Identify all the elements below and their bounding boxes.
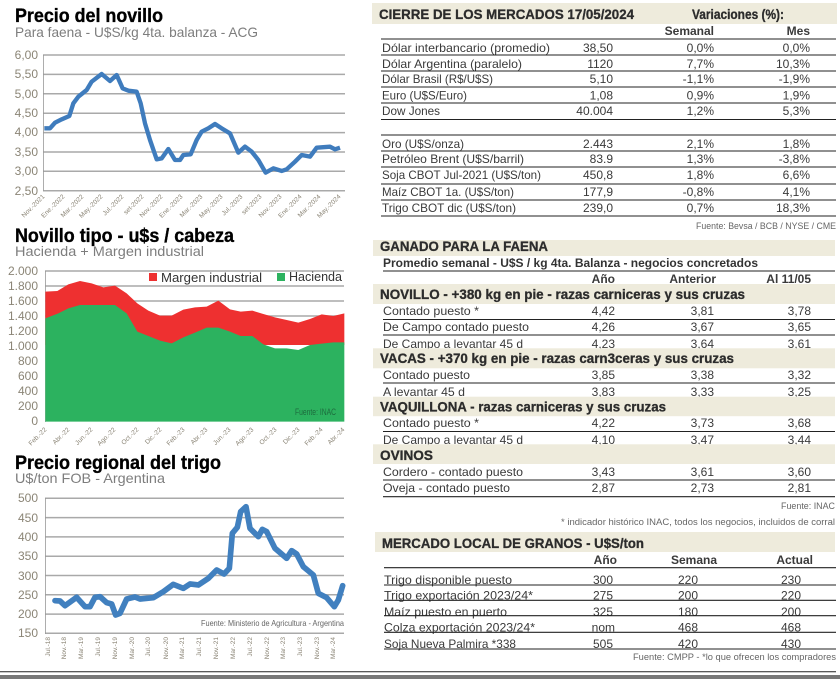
rows: novillo: De Campo contado puesto [383,320,529,334]
area chart: hacienda y margen industrial: 800 [18,354,38,368]
table: mercados: 1,9% [783,88,810,102]
area chart: hacienda y margen industrial: 1.000 [8,339,38,353]
column headers: Mes [787,24,810,38]
band: vacas [373,348,835,368]
band: ovinos [373,444,835,464]
line chart: precio del trigo: Nov.-22 [264,637,271,659]
header band: Variaciones (%): [692,7,784,22]
rows: novillo: 4,23 [592,337,615,351]
line chart: precio del novillo: May.-2022 [78,193,105,220]
column headers [594,553,813,567]
line chart: precio del trigo: Nov.-19 [112,637,119,659]
rows: novillo: 3,78 [788,304,811,318]
rows: vaquillona: 3,73 [691,416,714,430]
table: mercados: Maíz CBOT 1a. (U$S/ton) [382,185,514,199]
line chart: precio del trigo: Jul.-23 [297,637,304,657]
column headers: Actual [776,553,813,567]
area chart: hacienda y margen industrial [8,264,347,448]
table: mercados: 2,1% [687,137,714,151]
table: mercados: 1,2% [687,104,714,118]
table: mercados: 5,10 [590,72,613,86]
table: mercados: 0,7% [687,201,714,215]
line chart: precio del trigo: 400 [18,530,38,544]
line chart: precio del trigo: 450 [18,511,38,525]
line chart: precio del trigo: Mar.-24 [330,637,337,659]
table: mercados: 40.004 [576,104,613,118]
table: granos: 468 [781,621,801,635]
line chart: precio del trigo: Mar.-19 [78,637,85,659]
table: mercados [381,39,836,216]
band: vaquillona [373,397,835,416]
rows: novillo [383,304,835,351]
table: mercados: Dólar Brasil (R$/U$S) [382,72,493,86]
area chart: hacienda y margen industrial: 200 [18,399,38,413]
table: mercados: 1,08 [590,88,613,102]
area chart: hacienda y margen industrial: Dic.-23 [282,426,302,446]
area chart: hacienda y margen industrial: Abr.-24 [327,426,347,446]
area chart: hacienda y margen industrial: Jun.-22 [74,426,95,447]
line chart: precio del trigo: 300 [18,569,38,583]
table: mercados: 0,0% [687,41,714,55]
rows: ovinos: 3,60 [788,465,811,479]
line chart: precio del trigo: 500 [18,491,38,505]
line chart: precio del novillo: Nov.-2023 [258,193,284,219]
rows: novillo: 3,65 [788,320,811,334]
area chart: hacienda y margen industrial: Ago.-23 [234,426,256,448]
table: mercados: 7,7% [687,57,714,71]
table: mercados: 1,8% [687,168,714,182]
table: granos: 180 [678,605,698,619]
table: mercados: 83.9 [590,152,613,166]
line chart: precio del trigo: 150 [18,626,38,640]
title: precio del novillo: Precio del novillo [15,6,163,27]
table: mercados: -1,9% [779,72,810,86]
rows: ovinos: 2,81 [788,481,811,495]
table: mercados: 5,3% [783,104,810,118]
rows: novillo: 4,26 [592,320,615,334]
table: mercados: 239,0 [583,201,613,215]
line chart: precio del trigo: 350 [18,549,38,563]
area chart: hacienda y margen industrial: 1.800 [8,279,38,293]
table: mercados: Euro (U$S/Euro) [382,88,467,102]
rows: novillo: 4,42 [592,304,615,318]
table: granos: 220 [678,573,698,587]
header band: GANADO PARA LA FAENA [380,239,548,254]
line chart: precio del trigo: 250 [18,588,38,602]
rows: ovinos: 3,43 [592,465,615,479]
source: inac: Fuente: INAC [295,407,336,417]
rows: vacas: 3,83 [592,385,615,399]
band: novillo: NOVILLO - +380 kg en pie - razas carniceras y sus cruzas [380,287,745,302]
rows: vacas: 3,85 [592,368,615,382]
line chart: precio del trigo: Jul.-20 [145,637,152,657]
rows: vaquillona: 3,47 [691,433,714,447]
line chart: precio del trigo: Nov.-21 [213,637,220,659]
subtitle: fob argentina: U$/ton FOB - Argentina [15,470,165,486]
panel: cierre de los mercados [372,3,837,231]
area chart: hacienda y margen industrial: 1.200 [8,324,38,338]
line chart: precio del trigo: Mar.-23 [280,637,287,659]
rows: vaquillona [383,416,835,447]
line chart: precio del trigo: Jul.-21 [196,637,203,657]
table: granos: 200 [678,588,698,602]
rows: novillo: 3,61 [788,337,811,351]
table: mercados: Oro (U$S/onza) [382,137,464,151]
table: granos: 200 [781,605,801,619]
subtitle: hacienda + margen industrial: Hacienda + Margen industrial [15,243,204,259]
line chart: precio del novillo: 2,50 [15,184,38,198]
band: ovinos: OVINOS [380,448,433,463]
area chart: hacienda y margen industrial: Ago.-22 [96,426,118,448]
table: granos: nom [592,621,615,635]
table: mercados: 10,3% [776,57,810,71]
header band: MERCADO LOCAL DE GRANOS - U$S/ton [382,536,644,551]
table: mercados: Dólar Argentina (paralelo) [382,57,522,71]
column headers [592,272,811,286]
area chart: hacienda y margen industrial: Abr.-22 [52,426,72,446]
line chart: precio del novillo: Mar.-2022 [60,193,86,219]
rows: vacas: 3,33 [691,385,714,399]
line chart: precio del novillo: Jul.-2022 [102,193,126,217]
line chart: precio del novillo: 4,00 [15,125,38,139]
line chart: precio del trigo: Mar.-22 [230,637,237,659]
legend: margen industrial: Margen industrial [161,270,262,285]
legend: hacienda: Hacienda [289,269,343,284]
table: granos: 325 [593,605,613,619]
area chart: hacienda y margen industrial: Dic.-22 [144,426,164,446]
rows: ovinos: 2,87 [592,481,615,495]
rows: vacas: 3,32 [788,368,811,382]
area chart: hacienda y margen industrial: 1.400 [8,309,38,323]
area chart: hacienda y margen industrial: Oct.-23 [258,426,279,446]
table: mercados: 0,9% [687,88,714,102]
table: mercados: 1,8% [783,137,810,151]
table: granos: Trigo exportación 2023/24* [384,588,533,602]
rows: vaquillona: Contado puesto * [383,416,479,430]
table: granos: Colza exportación 2023/24* [384,621,535,635]
line chart: precio del novillo: 3,00 [15,164,38,178]
table: mercados: Dow Jones [382,104,440,118]
panel: precio regional del trigo [15,453,344,659]
rows: novillo: De Campo a levantar 45 d [383,337,523,351]
source: inac: Fuente: INAC [781,501,835,511]
table: granos: Soja Nueva Palmira *338 [384,637,516,651]
table: granos: 420 [678,637,698,651]
table: mercados: 450,8 [583,168,613,182]
band: vacas: VACAS - +370 kg en pie - razas carn3ceras y sus cruzas [380,351,734,366]
area chart: hacienda y margen industrial: 600 [18,369,38,383]
line chart: precio del trigo [18,491,344,659]
line chart: precio del novillo: Mar.-2024 [297,193,323,219]
column headers: Al 11/05 [766,272,811,286]
header band [372,3,837,24]
line chart: precio del novillo: Nov.-2022 [139,193,165,219]
line chart: precio del novillo: Ene.-2023 [158,193,185,220]
header band [375,532,835,552]
line chart: precio del novillo: 6,00 [15,48,38,62]
line chart: precio del trigo: Nov.-20 [163,637,170,659]
header band: CIERRE DE LOS MERCADOS 17/05/2024 [379,7,634,22]
rows: vacas: A levantar 45 d [383,385,465,399]
area chart: hacienda y margen industrial: 400 [18,384,38,398]
line chart: precio del novillo: Nov.-2021 [21,193,47,219]
table: granos: 230 [781,573,801,587]
line chart: precio del trigo: Nov.-18 [61,637,68,659]
line chart: precio del novillo: Jul.-2023 [221,193,245,217]
table: granos: 505 [593,637,613,651]
table: granos: 220 [781,588,801,602]
line chart: precio del trigo: Nov.-23 [314,637,321,659]
rows: ovinos: 3,61 [691,465,714,479]
rows: ovinos: Cordero - contado puesto [383,465,523,479]
line chart: precio del novillo: 5,50 [15,67,38,81]
rows: vacas: 3,25 [788,385,811,399]
column headers: Semanal [665,24,714,38]
line chart: precio del novillo: set-2023 [241,193,264,216]
subheading: promedio semanal: Promedio semanal - U$S / kg 4ta. Balanza - negocios concretados [383,256,758,270]
table: granos [384,568,836,651]
rows: ovinos: Oveja - contado puesto [383,481,510,495]
table: mercados: 2.443 [583,137,613,151]
source: cmpp: Fuente: CMPP - *lo que ofrecen los compradores [633,652,837,662]
line chart: precio del trigo: 200 [18,607,38,621]
line chart: precio del novillo: Mar.-2023 [179,193,205,219]
table: mercados: Petróleo Brent (U$S/barril) [382,152,524,166]
rows: vaquillona: 3,44 [788,433,811,447]
panel: ganado para la faena [373,239,835,527]
subtitle: para faena: Para faena - U$S/kg 4ta. balanza - ACG [15,24,258,40]
rows: vaquillona: 3,68 [788,416,811,430]
panel: novillo tipo [8,226,347,448]
table: granos: 300 [593,573,613,587]
table: mercados: 1,3% [687,152,714,166]
source: mercados: Fuente: Bevsa / BCB / NYSE / CME [696,221,836,231]
panel: precio del novillo [15,6,345,220]
table: granos: 275 [593,588,613,602]
line chart: precio del trigo: Mar.-21 [179,637,186,659]
area chart: hacienda y margen industrial: Oct.-22 [120,426,141,446]
rows: novillo: 3,64 [691,337,714,351]
column headers: Anterior [669,272,716,286]
rows: vacas [383,368,835,399]
table: granos: 468 [678,621,698,635]
area chart: hacienda y margen industrial: Jun.-23 [212,426,233,447]
line chart: precio del novillo: Ene.-2022 [40,193,67,220]
rows: ovinos: 2,73 [691,481,714,495]
table: granos: Maíz puesto en puerto [384,605,507,619]
line chart: precio del novillo: May.-2023 [198,193,225,220]
line chart: precio del trigo: Mar.-20 [129,637,136,659]
table: granos: Trigo disponible puesto [384,573,512,587]
table: mercados: 177,9 [583,185,613,199]
table: mercados: 1120 [587,57,613,71]
column headers: Año [594,553,617,567]
table: mercados: 0,0% [783,41,810,55]
table: mercados: 4,1% [783,185,810,199]
table: mercados: -3,8% [779,152,810,166]
area chart: hacienda y margen industrial: 0 [31,414,38,428]
line chart: precio del novillo: 3,50 [15,145,38,159]
line chart: precio del trigo: Jul.-22 [247,637,254,657]
column headers: Semana [671,553,717,567]
line chart: precio del trigo: Jul.-18 [45,637,52,657]
rows: vacas: 3,38 [691,368,714,382]
band: novillo [373,284,835,304]
rows: novillo: 3,67 [691,320,714,334]
rows: vacas: Contado puesto [383,368,470,382]
footnote: indicador historico: * indicador histórico INAC, todos los negocios, incluidos de corral [561,517,835,527]
band: vaquillona: VAQUILLONA - razas carniceras y sus cruzas [380,400,666,415]
header band [373,239,835,256]
line chart: precio del novillo: May.-2024 [316,193,343,220]
line chart: precio del novillo: set-2022 [123,193,146,216]
rows: vaquillona: 4,10 [592,433,615,447]
table: mercados: Trigo CBOT dic (U$S/ton) [382,201,516,215]
rows: novillo: 3,81 [691,304,714,318]
title: precio regional del trigo: Precio regional del trigo [15,453,221,474]
panel: mercado local de granos [375,532,837,662]
area chart: hacienda y margen industrial: 1.600 [8,294,38,308]
rows: novillo: Contado puesto * [383,304,479,318]
line chart: precio del novillo [15,48,345,220]
line chart: precio del novillo: 4,50 [15,106,38,120]
area chart: hacienda y margen industrial: Feb.-24 [304,426,325,447]
line chart: precio del trigo: Jul.-19 [95,637,102,657]
table: mercados: -0,8% [683,185,714,199]
table: mercados: 6,6% [783,168,810,182]
table: granos: 430 [781,637,801,651]
title: novillo tipo: Novillo tipo - u$s / cabeza [15,226,234,247]
table: mercados: Dólar interbancario (promedio) [382,41,550,55]
column headers: Año [592,272,615,286]
table: mercados: Soja CBOT Jul-2021 (U$S/ton) [382,168,541,182]
rows: vaquillona: De Campo a levantar 45 d [383,433,523,447]
line chart: precio del novillo: Ene.-2024 [277,193,304,220]
column headers [665,24,810,38]
table: mercados: 18,3% [776,201,810,215]
area chart: hacienda y margen industrial: 2.000 [8,264,38,278]
table: mercados: -1,1% [683,72,714,86]
rows: vaquillona: 4,22 [592,416,615,430]
line chart: precio del novillo: 5,00 [15,87,38,101]
source: ministerio de agricultura: Fuente: Ministerio de Agricultura - Argentina [201,618,344,628]
area chart: hacienda y margen industrial: Feb.-22 [28,426,49,447]
area chart: hacienda y margen industrial: Feb.-23 [166,426,187,447]
table: mercados: 38,50 [583,41,613,55]
rows: ovinos [383,465,835,497]
area chart: hacienda y margen industrial: Abr.-23 [190,426,210,446]
